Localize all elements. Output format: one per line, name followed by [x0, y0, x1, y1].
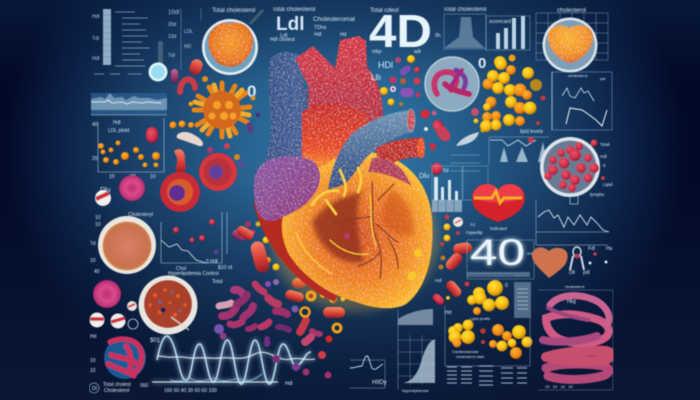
panel: top-left data table: Tdl [168, 53, 175, 59]
icon: ribbon and labels: pdl [583, 270, 590, 276]
icon: pink coiled vessel: cholesterol [565, 284, 584, 289]
icon: pink coiled vessel [538, 284, 613, 390]
icon: red heart with pulse [472, 184, 525, 222]
heart: lower-left purple chamber [254, 156, 320, 221]
plate: red berries [540, 137, 613, 197]
icons: cells upper left: 10 [95, 215, 101, 221]
icons: purple beans field [214, 221, 346, 378]
chart: middle-left decline [161, 212, 232, 285]
heading: total cholesterol labels: Total cholesterol [212, 8, 255, 14]
heading: total cholesterol labels: cholesterol [557, 8, 586, 14]
icon: ribbon and labels: Ha [606, 246, 613, 252]
panel: top-center labels: mkp [372, 49, 382, 55]
chart: middle-left decline: Total [212, 279, 223, 285]
heading: total cholesterol labels: Hd [340, 32, 347, 38]
heading: total cholesterol labels: Total cholesterol [443, 7, 486, 13]
heart glow [271, 168, 439, 312]
text: bottom-left labels: 160 60 40 30 60 60 100 [164, 388, 217, 394]
heading: total cholesterol labels: Hdl [314, 32, 322, 38]
chart: right line panel [552, 72, 612, 130]
panel: top-center labels [371, 14, 530, 82]
heart: dark interior and veins [296, 168, 414, 278]
panel: top-left data table: Hdl [92, 56, 100, 62]
icons: mid right molecules [420, 108, 486, 177]
panel: center-right side pills: A1 [470, 222, 476, 227]
icons: cells upper left: 7d [90, 241, 96, 247]
icons: cells upper left [90, 153, 237, 275]
chart: lower center mountains [350, 309, 436, 393]
icons: upper-left beans and dots [146, 57, 260, 174]
icon: pink coiled vessel: 10 10 10 10 [545, 384, 574, 389]
icon: ribbon and labels [569, 246, 613, 276]
plate: red berries: lymphs [590, 192, 605, 197]
chart: scatter left: LDL plotd [108, 128, 129, 134]
chart: lower center mountains: HIlDy [372, 380, 387, 386]
illustration: anatomical heart [253, 36, 433, 308]
heading: total cholesterol labels: Cholesteromal [313, 16, 355, 23]
heading: total cholesterol labels: Ldl [280, 33, 287, 39]
text: glowing 40: 0% [527, 251, 533, 256]
text: bottom-left labels: 10 [90, 368, 96, 374]
panel: center-right side pills: Indicator [490, 226, 508, 231]
icons: cells upper left: 40 [94, 269, 100, 275]
icons: pink cell and pills [90, 280, 138, 329]
text: bottom-left labels: Hdl [285, 381, 293, 387]
chart: scatter left: 40 [92, 122, 98, 128]
panel: top-left data table: 30d [168, 22, 177, 28]
panel: top-left data table: HD [184, 44, 192, 50]
chart: waves panel: 5d [443, 168, 449, 174]
panel: top-right grid chart [536, 13, 608, 60]
text: glowing 40: 40 [470, 232, 525, 273]
icons: pink coil bottom-left [104, 337, 146, 379]
panel: notes beside clusters: 0 [505, 283, 508, 289]
panel: top-left data table: Hdl [92, 14, 100, 20]
heading: total cholesterol labels: Total cdeol [370, 8, 399, 14]
icon: yellow clusters lower right [448, 280, 532, 359]
heart: right blue pulmonary tube [328, 109, 415, 190]
petri dish: pink coil [425, 57, 479, 111]
heart: blue vena cava [265, 52, 318, 180]
icon: ribbon and labels: Fdl [588, 246, 595, 252]
chart: right line panel: cholesterol [568, 73, 587, 78]
heading: total cholesterol labels [212, 7, 586, 43]
chart: top-left line trace [91, 93, 167, 115]
artwork [89, 5, 613, 394]
panel: bottom tables [447, 366, 527, 385]
icons: small molecules [380, 55, 420, 106]
panel: notes beside clusters: Cardiovascular [452, 349, 479, 354]
text: big zero: 0 [247, 82, 256, 101]
heart: main yellow-orange muscle [282, 152, 433, 308]
icons: cells upper left: Cholesteryl [128, 212, 153, 218]
icon: yellow cholesterol cluster [480, 54, 546, 132]
heading: total cholesterol labels: TDha [314, 25, 326, 31]
plate: red berries: 0 [603, 163, 606, 168]
icon: tan heart [532, 247, 568, 278]
icon: ribbon and labels: Dll [569, 270, 575, 276]
panel: notes beside clusters: cholesterol data [456, 354, 485, 359]
text: bottom-left labels: 060 [140, 383, 149, 389]
chart: lower center mountains: Hyperlipidemia [402, 388, 429, 393]
icon: spiky cell [194, 83, 250, 137]
panel: center-right side pills: Hyperlip [466, 230, 483, 235]
panel: top-left data table: LDL [184, 29, 193, 35]
chart: scatter left: 20 [92, 156, 98, 162]
panel: top-center labels: scorecard [489, 19, 511, 25]
chart: glowing waveform [152, 336, 315, 384]
panel: top-center labels: adr [414, 49, 422, 55]
panel: notes beside clusters: Lipid profile [470, 316, 491, 321]
icons: cells upper left: 10 [95, 222, 101, 228]
panel: center-right side pills: Hdl [435, 278, 442, 283]
icon: pink coiled vessel: Hkg [567, 299, 576, 305]
chart: right line panel: par [600, 76, 606, 81]
icons: cells upper left: 10 [90, 258, 96, 264]
chart: scatter left: 10 [109, 174, 115, 180]
text: big 4D: 4D [369, 5, 432, 57]
heart: red aorta [296, 36, 383, 173]
chart: scatter left: Dlu [100, 187, 111, 194]
text: glowing 40: Hyperlipidemia Scorecard [468, 272, 514, 278]
chart: middle-left decline: 0 Hdl [206, 259, 218, 265]
plate: red berries: Hdl [600, 154, 607, 159]
text: bottom-left labels: $01 [150, 338, 161, 344]
heading: total cholesterol labels: Hdl cholest [270, 37, 295, 43]
panel: top-center labels: HDl [378, 60, 393, 70]
panel: top-left data table: 10dl [168, 10, 179, 16]
heading: total cholesterol labels: Ldl [276, 14, 304, 35]
plate: red berries: Total [600, 142, 610, 147]
chart: scatter left: 10 [150, 174, 156, 180]
icon: magnifier [148, 41, 168, 82]
panel: top-left data table [92, 8, 201, 74]
chart: scatter left [92, 118, 164, 194]
bar chart: center right [419, 166, 488, 212]
plate: orange heart top left [202, 10, 263, 75]
heading: total cholesterol labels: Total cholesterol [272, 7, 315, 13]
chart: right pulse line [536, 196, 609, 245]
chart: scatter left: 10 [130, 174, 136, 180]
text: bottom-left labels [89, 334, 293, 394]
panel: top-center labels: Lllı [371, 73, 381, 82]
plate: red berries: Lipid [603, 182, 613, 187]
text: bottom-left labels: DI [92, 386, 97, 392]
text: bottom-left labels: Hd [90, 334, 97, 340]
chart: middle-left decline: Chol [176, 266, 186, 272]
text: bottom-left labels: 10 [90, 358, 96, 364]
plate: peach dish [98, 216, 156, 274]
text: bottom-left labels: Cholesterol [104, 388, 129, 394]
chart: scatter left: Hdl [113, 120, 121, 126]
chart: middle-left decline: $10 rd [218, 265, 232, 271]
text: bottom-left labels: Total cholest [103, 382, 131, 388]
panel: top-center labels: 0h [435, 33, 441, 39]
chart: waves panel [443, 129, 549, 174]
panel: center-right side pills: Hd [445, 310, 452, 316]
panel: top-left data table: Tdl [92, 36, 99, 42]
plate: orange heart top right [542, 18, 598, 72]
text: big zero [247, 55, 486, 101]
panel: center-right side pills [431, 214, 508, 316]
chart: waves panel: lipid levels [520, 129, 544, 135]
text: big zero: 0 [478, 55, 486, 72]
panel: notes beside clusters [445, 282, 531, 366]
panel: top-left data table: 10d [168, 34, 177, 40]
heart: red lower-left rim [253, 194, 353, 302]
text: glowing 40 [467, 232, 534, 279]
bar chart: center right: Dlu [419, 173, 430, 180]
chart: middle-left decline: Hyperlipidemia Control [168, 271, 219, 277]
heart: right red vessel [368, 138, 425, 186]
bowl: red speckles [138, 276, 198, 334]
